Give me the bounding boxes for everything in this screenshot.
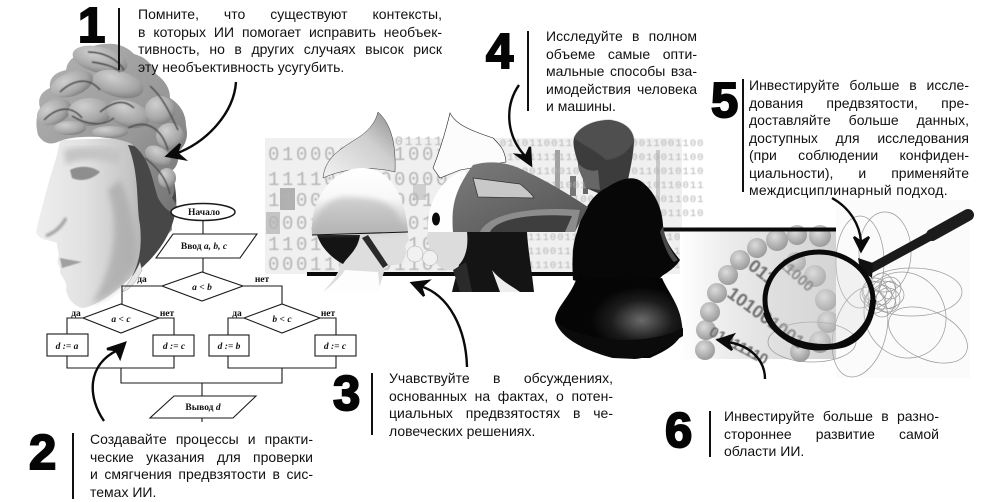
flowchart: нет xyxy=(255,275,270,285)
arrow 6: to DNA xyxy=(718,335,765,379)
binary code background: 1100000110010 xyxy=(268,190,450,212)
flowchart: Начало xyxy=(188,208,220,218)
divider 6 xyxy=(709,411,711,457)
binary code background: 110011011100101100111 xyxy=(528,246,681,258)
image: helmet head (man) xyxy=(312,112,408,292)
image: classical head sculpture xyxy=(33,41,187,308)
block 1: number and text xyxy=(78,0,442,75)
divider 1 xyxy=(118,8,120,70)
binary code background: 0100001101001 xyxy=(268,144,450,166)
binary code background: 111011011001011100101 xyxy=(528,260,681,272)
binary code background: 1111000000000 xyxy=(268,169,450,191)
image: DNA strand with binary: 101001001 xyxy=(724,283,808,352)
text 3 xyxy=(389,370,613,439)
text 3: циальных предвзятостях в че- xyxy=(389,405,613,421)
binary code background: 0001101001101 xyxy=(268,254,450,276)
text 1: в которых ИИ помогает исправить необъек- xyxy=(138,24,442,40)
arrow 2: to flowchart xyxy=(93,343,125,421)
binary code background: 1101010110101 xyxy=(268,234,450,256)
image: DNA strand with binary: 11000 xyxy=(775,255,817,295)
flowchart: Ввод a, b, c xyxy=(181,242,228,252)
number 2: 2 xyxy=(29,426,56,480)
flowchart: нет xyxy=(160,309,175,319)
image: DNA strand with binary: 01011110 xyxy=(706,324,771,369)
horizontal black line: right xyxy=(645,228,837,232)
block 5: number and text xyxy=(711,74,969,198)
text 6: области ИИ. xyxy=(724,443,804,459)
binary code background: 1110010110011010110010110011 xyxy=(500,180,704,192)
flowchart: Вывод d xyxy=(185,403,221,413)
divider 3 xyxy=(371,373,373,435)
text 1: эту необъективность усугубить. xyxy=(138,58,344,74)
image: DNA strand with binary xyxy=(680,225,839,369)
text 1 xyxy=(138,6,442,75)
flowchart: b < c xyxy=(272,315,292,325)
kiss bubbles xyxy=(407,246,438,266)
arrow 3: to faces xyxy=(412,281,467,367)
text 2: темах ИИ. xyxy=(90,484,156,500)
icon: magnifying glass xyxy=(765,215,968,348)
arrow 5: to magnifying glass xyxy=(832,198,869,251)
binary code background xyxy=(265,134,704,276)
text 2: и смягчения предвзятости в сис- xyxy=(90,466,313,482)
image: boy silhouette and chess knight xyxy=(555,120,683,359)
text 5 xyxy=(749,77,969,198)
text 5: циальности), и применяйте xyxy=(749,164,969,180)
binary code background: 0001110010010 xyxy=(268,213,450,235)
text 2: ческие указания для проверки xyxy=(90,448,313,464)
divider 4 xyxy=(527,31,529,111)
text 5: междисциплинарный подход. xyxy=(749,182,948,198)
flowchart: да xyxy=(232,309,242,319)
text 3: Учавствуйте в обсуждениях, xyxy=(389,370,613,386)
text 2 xyxy=(90,431,313,500)
flowchart: да xyxy=(137,275,147,285)
text 6: стороннее развитие самой xyxy=(724,426,939,442)
arrow 4: to device xyxy=(509,85,531,165)
flowchart: a < c xyxy=(111,315,131,325)
text 6: Инвестируйте больше в разно- xyxy=(724,408,939,424)
image: device helmet (woman) xyxy=(427,113,588,292)
text 6 xyxy=(724,408,939,459)
image: spirograph diagram xyxy=(768,200,976,383)
block 2: number and text xyxy=(29,426,313,500)
binary code background: 1100111111100101110010011100 xyxy=(500,152,704,164)
text 5: доставляйте больше данных, xyxy=(749,112,969,128)
text 4 xyxy=(546,28,698,114)
flowchart: да xyxy=(71,309,81,319)
flowchart: d := c xyxy=(324,342,347,352)
flowchart: a < b xyxy=(192,283,212,293)
flowchart: d := a xyxy=(56,342,79,352)
binary code background: 111001100101110010110 xyxy=(528,232,681,244)
binary code background: 1100101101011001011010011010 xyxy=(500,208,704,220)
binary code background: 0110110011001100110011001100 xyxy=(500,138,704,150)
horizontal black line: centre xyxy=(307,272,582,276)
text 4: имодействия человека xyxy=(546,80,697,96)
divider 2 xyxy=(72,433,74,499)
flowchart: d := b xyxy=(218,342,241,352)
text 1: тивность, но в других случаях высок риск xyxy=(138,41,442,57)
text 1: Помните, что существуют контексты, xyxy=(138,6,442,22)
block 3: number and text xyxy=(333,367,613,439)
flowchart xyxy=(47,204,356,422)
text 4: и машины. xyxy=(546,98,616,114)
text 4: Исследуйте в полном xyxy=(546,28,697,44)
text 3: ловеческих решениях. xyxy=(389,422,535,438)
text 5: доступных для исследования xyxy=(749,130,969,146)
text 4: мальные способы вза- xyxy=(546,63,697,79)
binary code background: 01111 xyxy=(395,134,444,149)
number 3: 3 xyxy=(333,367,360,421)
number 5: 5 xyxy=(711,74,738,128)
block 4: number and text xyxy=(486,25,698,114)
binary code background: 0101101001100101110010011001 xyxy=(500,194,704,206)
text 5: (при соблюдении конфиден- xyxy=(749,147,969,163)
image: DNA strand with binary: 011 xyxy=(745,255,780,289)
divider 5 xyxy=(742,79,744,192)
number 6: 6 xyxy=(665,404,692,458)
block 6: number and text xyxy=(665,404,939,459)
text 3: основанных на фактах, о потен- xyxy=(389,388,613,404)
binary code background: 0010011001011100100110010110 xyxy=(500,166,704,178)
text 5: дования предвзятости, пре- xyxy=(749,94,969,110)
text 5: Инвестируйте больше в иссле- xyxy=(749,77,969,93)
flowchart: d := c xyxy=(163,342,186,352)
number 4: 4 xyxy=(486,25,513,79)
text 2: Создавайте процессы и практи- xyxy=(90,431,313,447)
text 4: объеме самые опти- xyxy=(546,46,697,62)
arrow 1: to head xyxy=(167,82,236,159)
flowchart: нет xyxy=(321,309,336,319)
number 1: 1 xyxy=(78,0,105,53)
